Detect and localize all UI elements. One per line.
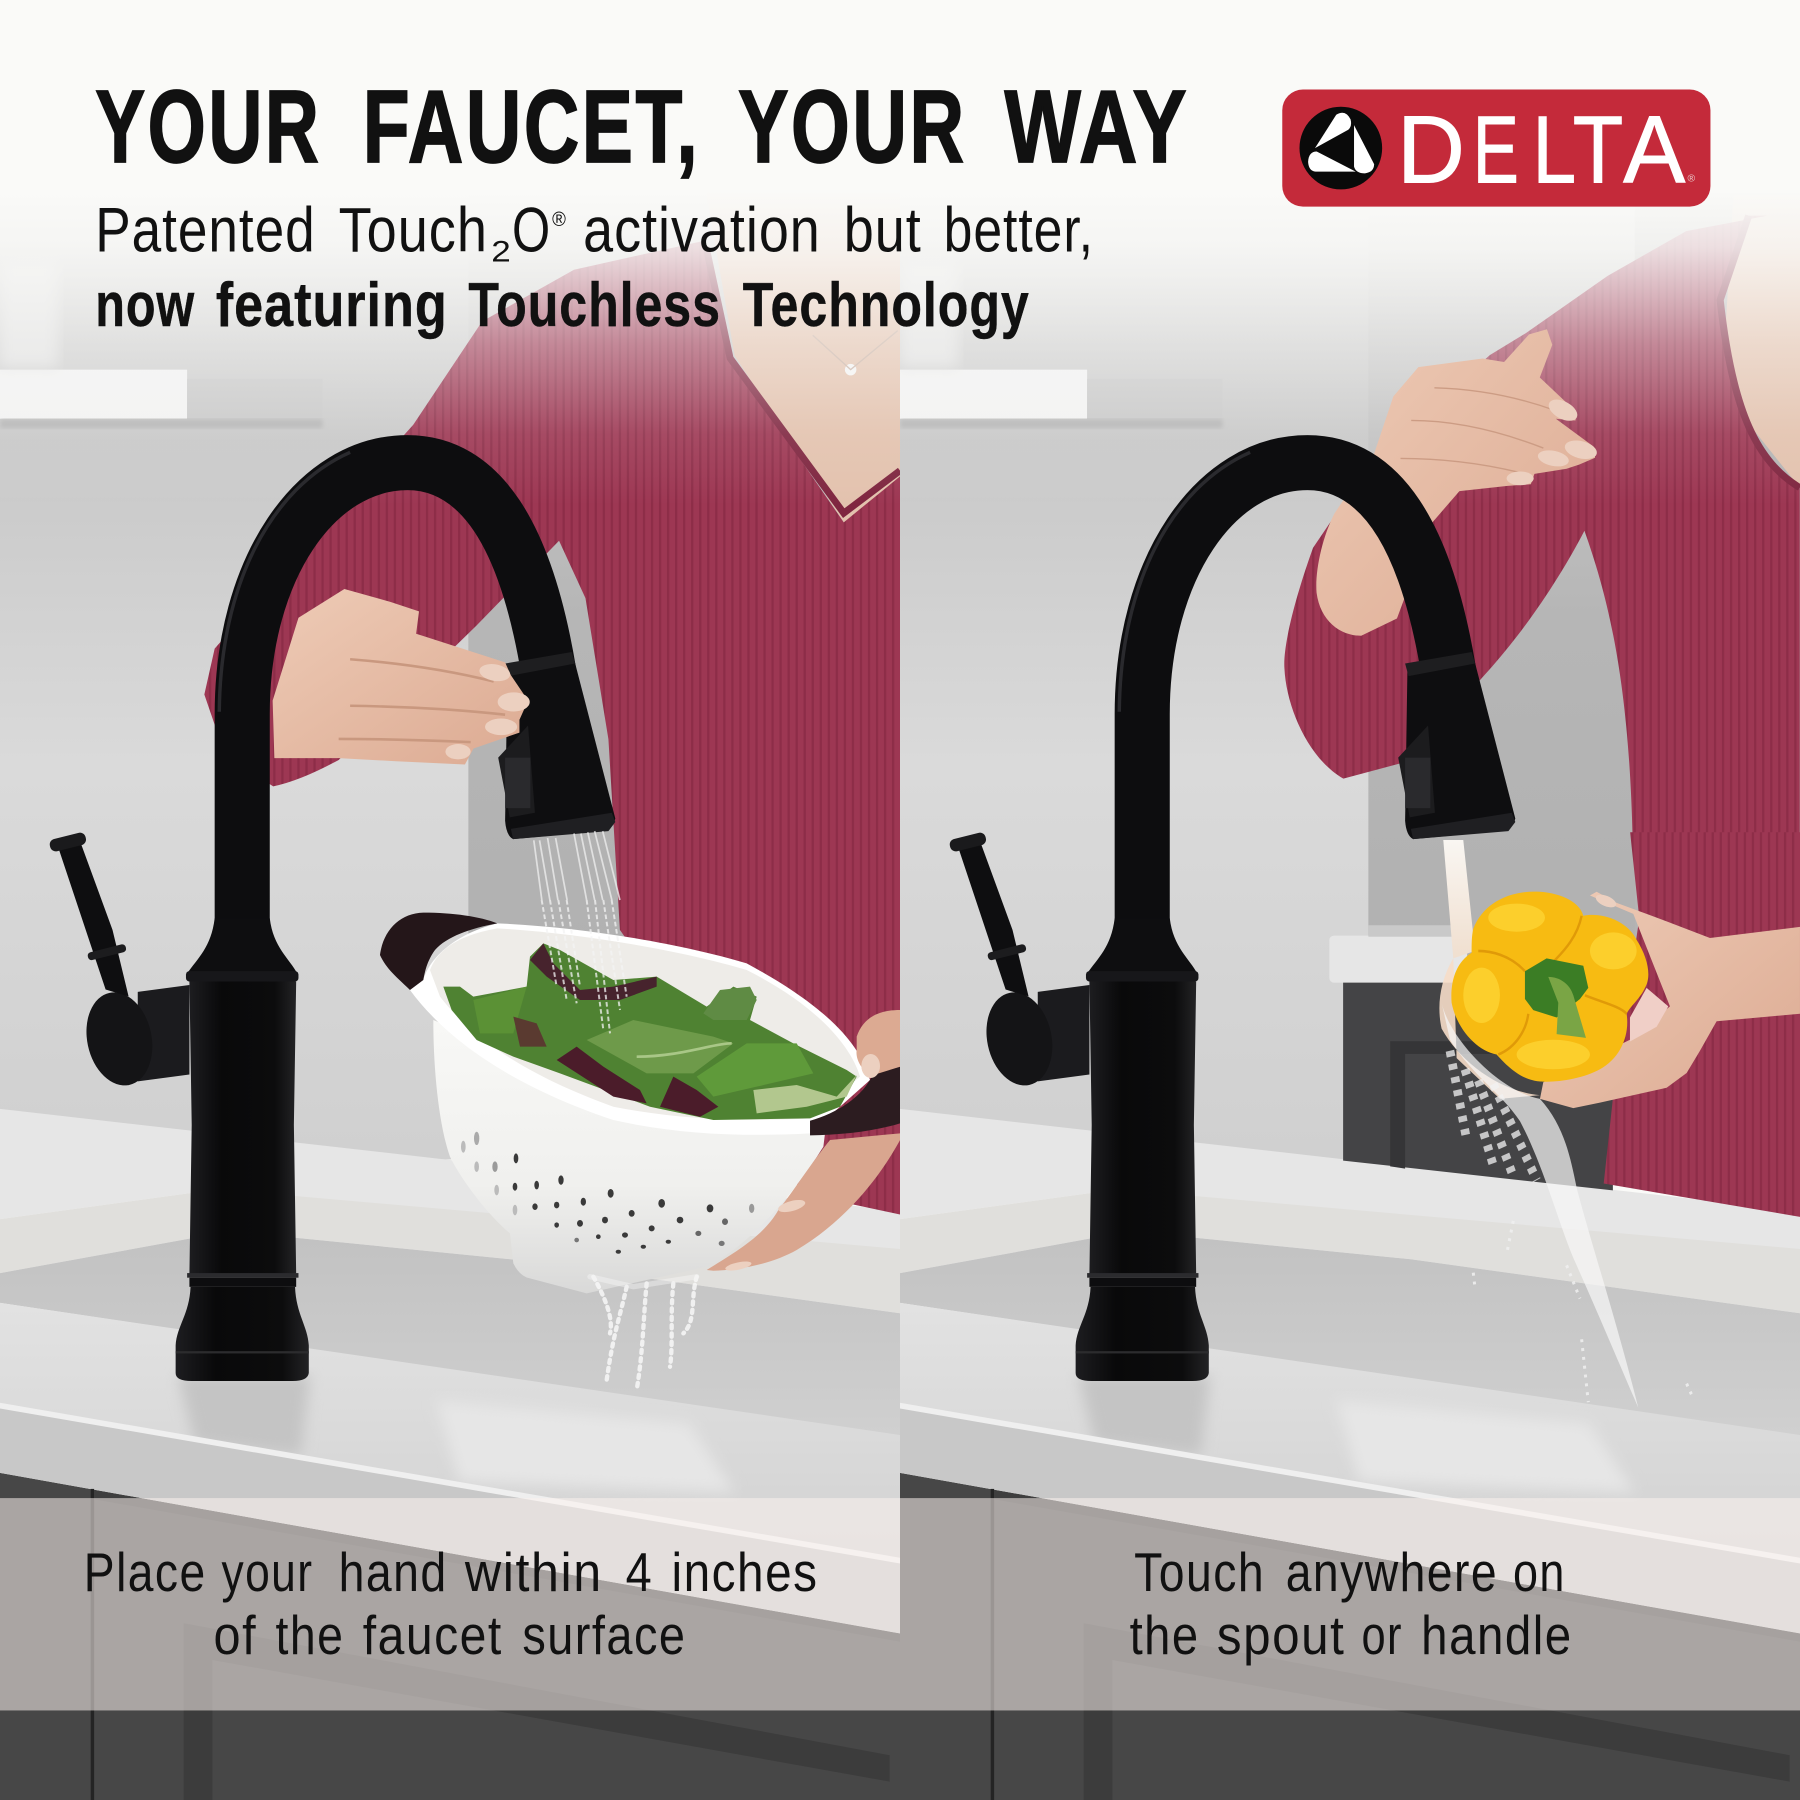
subtitle line one: but — [844, 195, 922, 265]
subtitle line one: Patented — [95, 195, 316, 265]
caption: right panel — [1130, 1541, 1573, 1666]
hand: touching faucet — [1316, 329, 1599, 636]
subtitle line two — [95, 271, 1030, 340]
caption: left panel: the — [276, 1604, 344, 1666]
yellow bell pepper — [1451, 892, 1648, 1082]
wordmark letters: E — [1473, 97, 1519, 203]
wordmark letters: T — [1573, 97, 1623, 203]
wordmark letters: D — [1397, 97, 1465, 203]
colander bowl body — [433, 1020, 827, 1293]
caption: left panel: Place — [84, 1541, 207, 1603]
pepper, hand and water group — [1439, 840, 1800, 1408]
subtitle line one: O — [512, 195, 551, 265]
panel: left scene objects — [49, 452, 900, 1390]
caption: right panel: the — [1130, 1604, 1200, 1666]
panel: left photo background — [0, 0, 900, 1800]
salad greens — [443, 943, 857, 1120]
caption band: translucent overlay — [0, 1498, 1800, 1710]
caption: left panel: your — [222, 1541, 313, 1603]
subtitle line one: better, — [944, 195, 1094, 265]
subtitle line one — [95, 195, 1094, 269]
caption: right panel: Touch — [1134, 1541, 1265, 1603]
logo: Delta — [1282, 90, 1710, 207]
caption: left panel: 4 — [626, 1541, 653, 1603]
caption: left panel — [84, 1541, 818, 1666]
woman: right panel sweater — [1284, 195, 1800, 1217]
caption: left panel: hand — [339, 1541, 448, 1603]
woman: left panel sweater — [204, 172, 900, 1215]
hand holding colander — [707, 1010, 900, 1272]
caption: right panel: spout — [1217, 1604, 1345, 1666]
subtitle line two: featuring — [216, 271, 448, 340]
caption: right panel: or — [1361, 1604, 1403, 1666]
title: YOUR — [738, 68, 967, 184]
title: YOUR — [95, 68, 321, 184]
caption: right panel: anywhere — [1286, 1541, 1498, 1603]
subtitle line one: ® — [552, 208, 566, 231]
panel: right photo background — [900, 0, 1800, 1800]
icon: faucet left — [49, 452, 615, 1381]
wordmark letters: A — [1623, 97, 1686, 203]
wordmark letters: L — [1533, 97, 1576, 203]
hand: hovering near faucet — [273, 589, 530, 764]
hand holding pepper — [1540, 892, 1800, 1108]
caption: left panel: surface — [522, 1604, 686, 1666]
fade: white header background — [0, 0, 1800, 505]
icon: faucet right — [949, 452, 1515, 1381]
caption: left panel: faucet — [363, 1604, 503, 1666]
water spray from spray head — [534, 831, 620, 900]
title — [95, 68, 1189, 184]
subtitle line two: Technology — [743, 271, 1030, 340]
subtitle line one: Touch — [339, 195, 488, 265]
water film on pepper — [1439, 958, 1540, 1099]
panel: right scene objects — [949, 329, 1800, 1408]
subtitle line two: now — [95, 271, 195, 340]
caption: left panel: inches — [672, 1541, 818, 1603]
subtitle line one: 2 — [491, 236, 511, 269]
colander with salad — [380, 900, 900, 1390]
water stream from spout — [1443, 840, 1475, 958]
water runoff — [1442, 1003, 1693, 1408]
colander handle left — [380, 913, 497, 990]
subtitle line one: activation — [583, 195, 821, 265]
water spray into colander — [542, 900, 627, 1033]
caption: left panel: within — [464, 1541, 603, 1603]
caption: left panel: of — [214, 1604, 257, 1666]
title: WAY — [1004, 68, 1189, 184]
title: FAUCET, — [363, 68, 700, 184]
colander handle right — [810, 1067, 900, 1135]
colander rim — [410, 923, 870, 1135]
icon: Delta triangle mark — [1299, 107, 1382, 189]
wordmark letters: ® — [1688, 173, 1696, 184]
water drips — [590, 1277, 697, 1390]
wordmark letters — [1397, 97, 1696, 203]
subtitle line two: Touchless — [468, 271, 721, 340]
caption: right panel: handle — [1421, 1604, 1573, 1666]
colander holes — [461, 1132, 754, 1254]
caption: right panel: on — [1513, 1541, 1566, 1603]
